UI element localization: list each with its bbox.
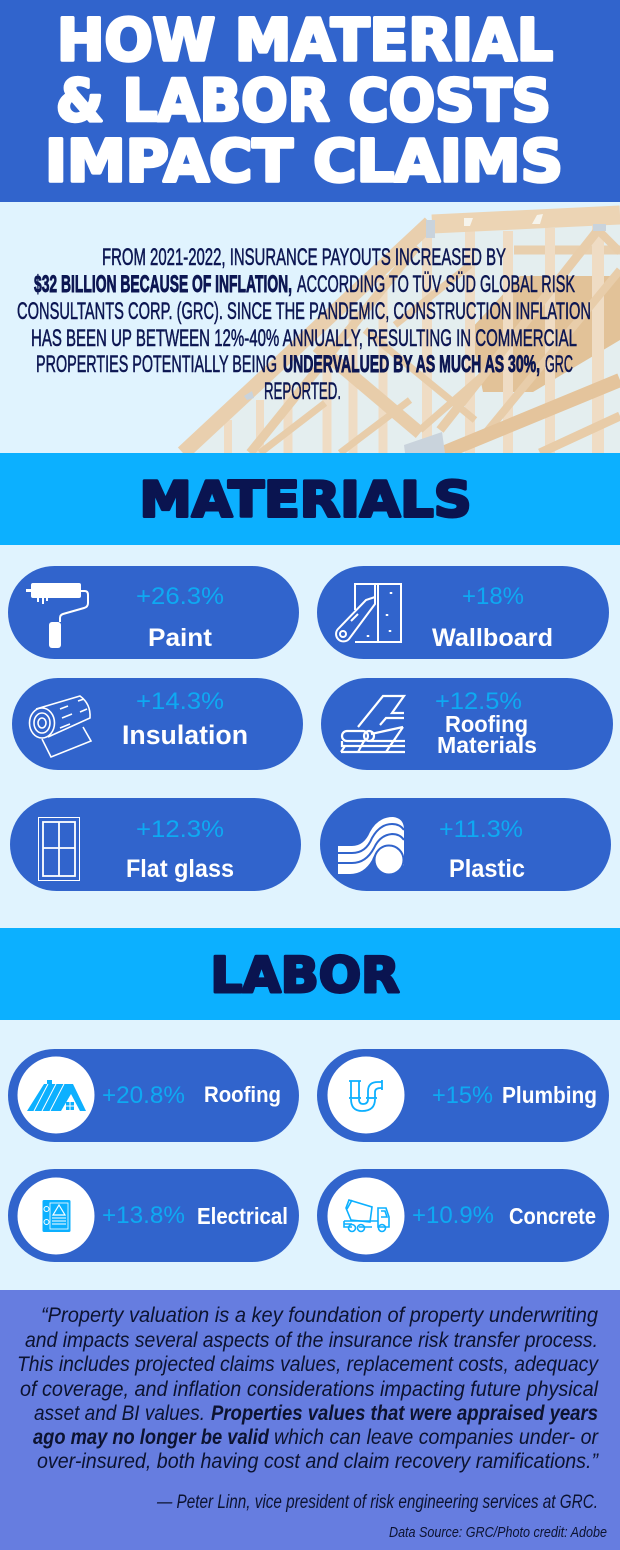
section heading: materials xyxy=(0,453,620,545)
intro paragraph: GRC xyxy=(545,351,573,378)
card: labor electrical xyxy=(8,1169,299,1262)
card: plastic: Plastic xyxy=(449,855,525,883)
quote text: asset and BI values. xyxy=(34,1402,205,1425)
card: plastic xyxy=(320,798,611,891)
card: labor plumbing xyxy=(317,1049,609,1142)
card: labor electrical: +13.8% xyxy=(102,1202,185,1229)
icon: paint roller xyxy=(26,583,88,648)
icon: plastic sheets xyxy=(338,817,404,874)
intro paragraph: PROPERTIES POTENTIALLY BEING xyxy=(36,351,277,378)
card: labor roofing: +20.8% xyxy=(102,1082,185,1109)
card: labor roofing: Roofing xyxy=(204,1082,281,1107)
quote text xyxy=(17,1304,599,1473)
card: insulation: +14.3% xyxy=(136,688,224,715)
card: flat glass xyxy=(10,798,301,891)
header banner with title: HOW MATERIAL xyxy=(57,6,553,74)
card: insulation xyxy=(12,678,303,770)
header banner with title: & LABOR COSTS xyxy=(56,66,551,134)
card: paint: Paint xyxy=(148,624,213,652)
card: roofing materials: Roofing xyxy=(445,711,528,737)
icon: concrete mixer truck xyxy=(344,1200,389,1232)
quote text: “Property valuation is a key foundation of property underwriting xyxy=(41,1304,598,1327)
quote text: ago may no longer be valid xyxy=(33,1426,270,1449)
card: wallboard: +18% xyxy=(462,583,524,610)
section heading: materials: MATERIALS xyxy=(140,472,472,528)
quote panel xyxy=(0,1290,620,1550)
card: insulation: Insulation xyxy=(122,720,248,750)
card: labor concrete xyxy=(317,1169,609,1262)
card: wallboard: Wallboard xyxy=(432,624,553,652)
card: labor electrical: Electrical xyxy=(197,1203,288,1229)
card: roofing materials: +12.5% xyxy=(435,688,522,715)
icon: house roof xyxy=(27,1080,86,1111)
card: labor roofing xyxy=(8,1049,299,1142)
quote text: over-insured, both having cost and claim recovery ramifications.” xyxy=(37,1450,599,1473)
icon: window xyxy=(38,818,80,880)
card: roofing materials xyxy=(321,678,613,770)
icon: roofing roll xyxy=(341,696,405,752)
card: flat glass: Flat glass xyxy=(126,855,234,883)
card: paint xyxy=(8,566,299,659)
header banner with title: IMPACT CLAIMS xyxy=(45,127,563,195)
card: labor plumbing: +15% xyxy=(432,1082,493,1109)
card: plastic: +11.3% xyxy=(439,816,523,843)
quote text: of coverage, and inflation considerations impacting future physical xyxy=(20,1378,599,1401)
intro paragraph: $32 BILLION BECAUSE OF INFLATION, xyxy=(34,271,292,298)
card: wallboard xyxy=(317,566,609,659)
card: labor concrete: Concrete xyxy=(509,1203,596,1229)
icon: insulation roll xyxy=(30,696,91,757)
section heading: labor: LABOR xyxy=(210,947,400,1004)
card: roofing materials: Materials xyxy=(437,732,537,758)
card: flat glass: +12.3% xyxy=(136,816,224,843)
card: labor plumbing: Plumbing xyxy=(502,1082,597,1108)
icon: pipe trap xyxy=(349,1080,382,1111)
card: paint: +26.3% xyxy=(136,583,224,610)
card: labor concrete: +10.9% xyxy=(412,1202,494,1229)
icon: wallboard cutter xyxy=(336,584,401,642)
section heading: labor xyxy=(0,928,620,1020)
photo: wooden roof truss xyxy=(183,206,620,453)
intro paragraph: REPORTED. xyxy=(264,378,341,405)
header banner with title xyxy=(0,0,620,202)
icon: electrical panel xyxy=(42,1200,70,1232)
intro paragraph xyxy=(17,244,591,405)
quote text: which can leave companies under- or xyxy=(274,1426,599,1449)
